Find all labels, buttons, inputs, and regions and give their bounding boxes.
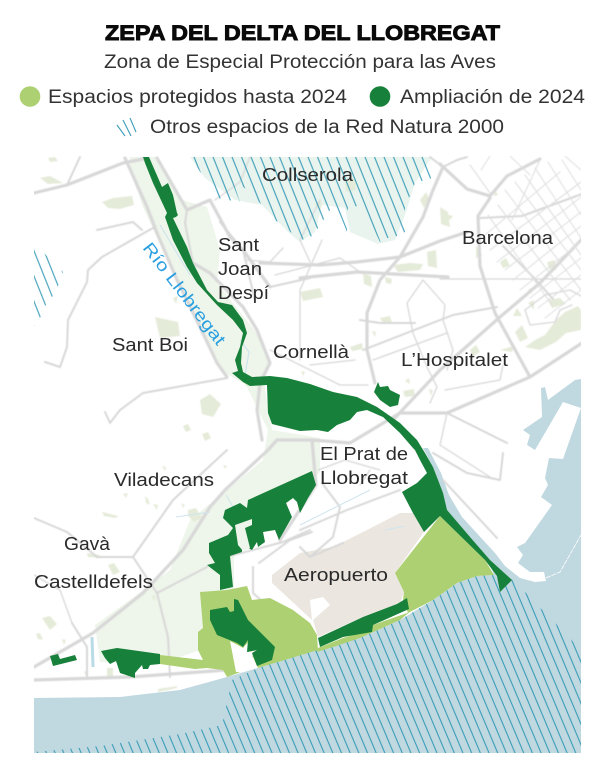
legend: Natura 2000: Otros espacios de la Red Natura 2000	[150, 117, 504, 138]
legend	[20, 86, 585, 138]
label: Cornellà: Cornellà	[273, 342, 350, 362]
sea and port	[34, 379, 581, 753]
expansion: Castelldefels	[50, 654, 77, 666]
airport	[272, 513, 424, 637]
expansion: Llobregat river strip	[143, 157, 512, 592]
Natura 2000 hatch: sea	[34, 575, 581, 753]
2024 expansion areas	[50, 157, 512, 678]
legend: protected spaces: Espacios protegidos hasta 2024	[48, 87, 347, 108]
label: El Prat de Llobregat	[320, 444, 408, 488]
Barcelona street grid	[470, 156, 581, 318]
map	[34, 156, 582, 753]
label: Aeropuerto: Aeropuerto	[284, 565, 388, 585]
label: Río Llobregat: Río Llobregat	[139, 239, 230, 349]
label: Sant Boi: Sant Boi	[112, 335, 188, 355]
label: Barcelona: Barcelona	[462, 228, 554, 248]
label: Castelldefels: Castelldefels	[34, 572, 153, 592]
map labels	[34, 165, 554, 592]
gap in protected area	[230, 640, 258, 672]
label: El Prat de Llobregat: Llobregat	[320, 468, 408, 488]
river and canals	[92, 225, 405, 667]
label: Sant Joan Despí: Sant	[218, 235, 259, 255]
expansion: central delta	[207, 471, 316, 590]
label: Sant Joan Despí: Joan	[218, 259, 262, 279]
expansion: inner delta	[210, 599, 275, 666]
protected: coastal strip	[317, 610, 412, 652]
Collserola pale area	[190, 157, 432, 244]
subtitle: Zona de Especial Protección para las Aves	[104, 52, 496, 73]
protected spaces until 2024	[160, 516, 494, 677]
label: Gavà: Gavà	[64, 534, 111, 554]
expansion: airport strip	[318, 598, 409, 647]
label: Collserola: Collserola	[262, 165, 354, 185]
expansion: L'Hospitalet islet	[374, 382, 400, 407]
label: Sant Joan Despí	[218, 235, 269, 303]
Natura 2000 hatch: Collserola	[190, 157, 432, 242]
label: L'Hospitalet: L’Hospitalet	[401, 350, 508, 370]
legend: 2024 expansion: Ampliación de 2024	[400, 87, 585, 108]
parks	[36, 157, 581, 692]
pale protected corridor and delta	[95, 157, 320, 664]
title: ZEPA DEL DELTA DEL LLOBREGAT	[105, 21, 500, 45]
protected: eastern delta	[395, 516, 494, 613]
breakwater	[546, 535, 581, 578]
Natura 2000 hatch: west	[34, 248, 63, 326]
road network	[34, 156, 582, 680]
protected: western delta	[160, 586, 318, 677]
label: Sant Joan Despí: Despí	[218, 283, 269, 303]
expansion: west coast	[101, 648, 160, 678]
label: Viladecans: Viladecans	[114, 470, 214, 490]
notch in central delta	[235, 519, 252, 551]
label: El Prat de Llobregat: El Prat de	[320, 444, 408, 464]
